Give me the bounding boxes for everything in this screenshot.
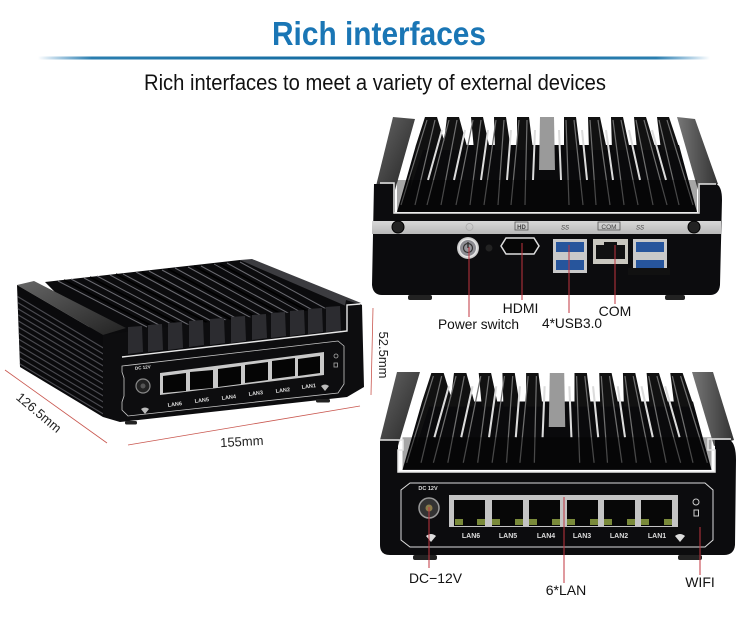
heatsink fins [403,373,712,470]
strip icons: SS [561,226,569,232]
front white trim [122,304,360,357]
LAN labels: LAN5 [499,533,517,540]
end caps [376,117,718,190]
body [380,440,736,555]
USB left [553,239,587,273]
white trim [380,439,731,472]
DC jack [135,364,151,393]
label: LAN: 6*LAN [546,582,586,598]
dimension: height: 52.5mm [376,332,391,378]
indicator hole [486,244,492,252]
LAN labels: LAN2 [610,533,628,540]
label: USB: 4*USB3.0 [542,315,602,331]
heatsink fins [397,117,697,212]
DC jack: DC 12V [418,486,438,492]
feet [125,399,330,424]
LAN labels [462,533,666,540]
status indicators [334,354,338,367]
right end cap [240,259,361,306]
dimension: width: 155mm [220,433,264,450]
feet [408,295,685,300]
title: Rich interfaces [272,15,486,52]
front panel frame [122,341,344,416]
panel: front view with LAN ports [380,372,736,598]
leader lines [469,243,615,317]
feet [413,555,702,560]
strip icons: COM [601,224,617,231]
subtitle: Rich interfaces to meet a variety of external devices [144,70,606,95]
leader lines [429,497,700,583]
LAN labels: LAN5 [194,397,209,405]
panel: rear view with ports [372,117,722,332]
panel: device perspective view with dimensions [5,259,391,450]
LAN labels: LAN1 [301,383,316,391]
label: COM: COM [599,303,631,319]
power button [457,237,479,259]
wifi marks [141,384,329,414]
LAN labels: LAN1 [648,533,666,540]
screws [392,221,700,233]
left end cap [17,281,126,335]
dimension: depth: 126.5mm [13,389,64,436]
LAN labels: LAN3 [248,390,263,398]
COM port [593,239,628,264]
label: HDMI: HDMI [503,300,538,316]
front panel frame [401,483,713,547]
end caps [380,372,734,446]
LAN labels: LAN4 [537,533,555,540]
LAN port block [449,495,678,527]
wifi marks [426,534,685,542]
LAN labels: LAN6 [462,533,480,540]
strip icons: HD [517,225,526,231]
title rule [38,56,710,60]
status indicators [693,499,699,516]
LAN labels [167,383,316,409]
label: WIFI: WIFI [685,574,715,590]
LAN port block [160,352,324,395]
white trim [380,183,716,213]
LAN labels: LAN3 [573,533,591,540]
dimension lines [5,308,373,445]
LAN labels: LAN4 [221,394,237,402]
LAN labels: LAN2 [275,387,290,395]
label: DC: DC−12V [409,570,463,586]
LAN labels: LAN6 [167,401,182,409]
DC jack: DC 12V [135,364,151,371]
strip icons [466,222,644,232]
body [372,184,722,295]
front face [103,300,364,422]
side face with ribs [15,285,105,417]
USB right [628,239,670,275]
fin ends above trim [128,306,341,354]
DC jack [418,486,439,518]
HDMI port [501,238,539,254]
strip icons: SS [636,226,644,232]
label: power switch: Power switch [438,316,519,332]
top face heatsink [45,260,362,345]
silver strip [372,221,721,234]
